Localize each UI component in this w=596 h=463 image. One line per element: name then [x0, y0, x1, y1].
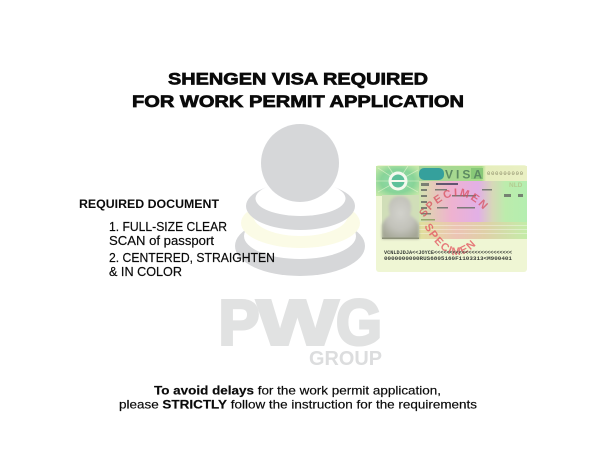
- footer note: [119, 384, 477, 412]
- visa specimen image: [376, 165, 527, 272]
- visa: specimen stamp top: SPECIMEN: [420, 188, 488, 216]
- visa: teal emblem strip: [419, 168, 444, 180]
- visa: blurred portrait photo: [382, 195, 419, 239]
- list item 1: 1. FULL-SIZE CLEAR: [109, 220, 227, 234]
- watermark: bottom ring: [235, 213, 365, 276]
- watermark: PWG wordmark: W: [257, 286, 339, 358]
- watermark: upper ring: [246, 181, 355, 230]
- watermark: PWG Group logo: [218, 124, 382, 370]
- text block: required document: [79, 197, 275, 279]
- visa: green emblem: [376, 166, 419, 196]
- list item 2: & IN COLOR: [109, 265, 182, 279]
- title: [132, 70, 464, 111]
- visa: top strip: [419, 166, 527, 181]
- list item 2: [109, 251, 275, 279]
- visa: machine readable zone: VCNLDJDJA<<JOYCE<<<<<<<<<<<<<<<<<<<<<<<<<: [384, 249, 513, 256]
- visa: VISA label: VISA: [445, 168, 482, 182]
- visa: machine readable zone: [384, 249, 513, 262]
- watermark: yellow ring: [241, 196, 360, 248]
- visa: card background: [376, 165, 527, 272]
- visa: lower band: [419, 222, 527, 239]
- watermark: PWG wordmark: G: [336, 286, 382, 358]
- heading: required document: REQUIRED DOCUMENT: [79, 197, 220, 211]
- visa: data fields: [421, 183, 523, 220]
- watermark: PWG wordmark: P: [218, 286, 260, 358]
- visa: specimen stamp bottom: SPECIMEN: [425, 224, 476, 256]
- watermark: head circle: [261, 124, 339, 202]
- visa: country code: NLD: [509, 182, 523, 189]
- visa: rainbow security area: [419, 180, 527, 224]
- list item 1: [109, 220, 227, 248]
- watermark: PWG wordmark: [218, 286, 382, 358]
- title: SHENGEN VISA REQUIRED: [168, 70, 428, 88]
- list item 2: 2. CENTERED, STRAIGHTEN: [109, 251, 275, 265]
- footer note: please STRICTLY follow the instruction for the requirements: [119, 398, 477, 412]
- visa: machine readable zone: 0000000000RUS6805160F1103313<M900401: [384, 255, 513, 262]
- title: FOR WORK PERMIT APPLICATION: [132, 92, 464, 111]
- visa: serial number: 000000000: [487, 170, 523, 177]
- footer note: To avoid delays for the work permit application,: [154, 384, 441, 398]
- watermark: GROUP wordmark: GROUP: [309, 348, 382, 370]
- list item 1: SCAN of passport: [109, 234, 215, 248]
